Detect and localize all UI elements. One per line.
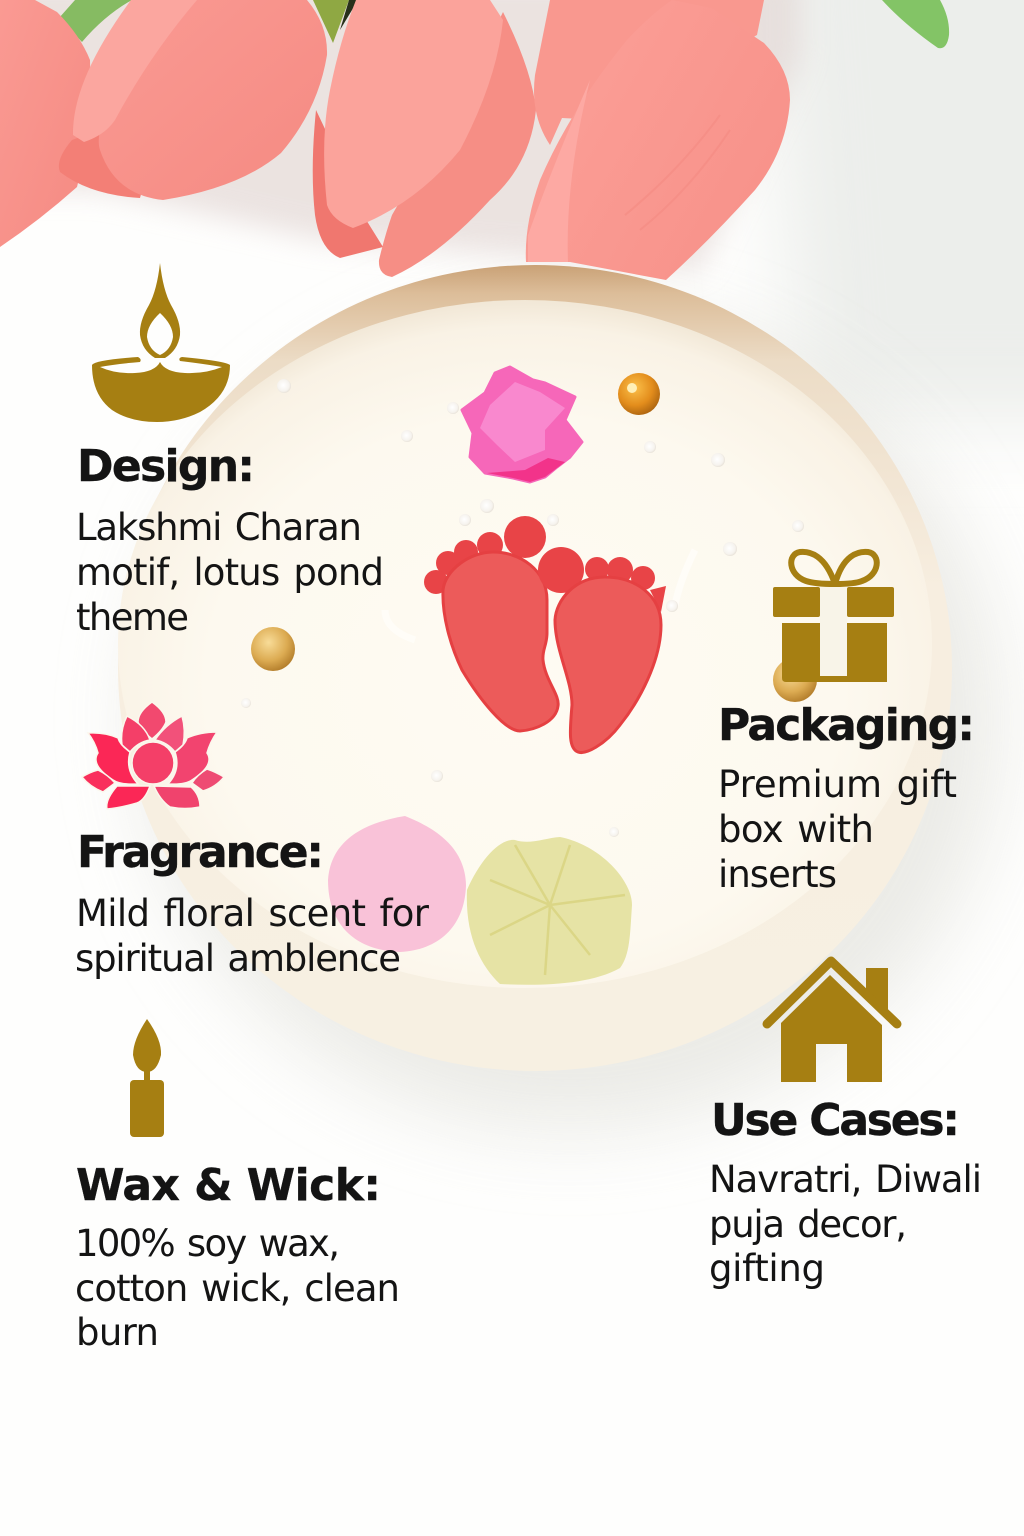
text block: use cases <box>709 1095 982 1290</box>
text block: wax and wick: Wax & Wick: <box>76 1160 381 1211</box>
text block: fragrance: Fragrance: <box>77 827 324 878</box>
text block: use cases: Use Cases: <box>711 1095 960 1146</box>
text block: fragrance <box>75 827 430 980</box>
text block: wax and wick: 100% soy wax, <box>75 1222 340 1265</box>
text block: fragrance: spiritual amblence <box>75 937 401 980</box>
text block: design: motif, lotus pond <box>76 551 384 594</box>
icon: house <box>767 961 897 1082</box>
pink lotus decoration <box>462 367 582 482</box>
text block: packaging <box>718 700 975 896</box>
foot print left <box>424 516 558 731</box>
text block: use cases: gifting <box>709 1247 825 1290</box>
tulips <box>0 0 949 280</box>
stems <box>59 0 132 42</box>
rim <box>118 265 952 1071</box>
text block: use cases: puja decor, <box>709 1203 907 1246</box>
text block: packaging: box with <box>718 808 874 851</box>
tulip 1 <box>0 0 90 247</box>
icon: lotus <box>82 702 224 809</box>
candle <box>118 265 952 1071</box>
wax surface <box>118 300 932 988</box>
text block: design <box>76 441 384 639</box>
text block: packaging: Packaging: <box>718 700 975 751</box>
tulip 4 <box>534 0 764 145</box>
text block: packaging: Premium gift <box>718 763 957 806</box>
icon: candle <box>130 1019 164 1137</box>
text block: design: Design: <box>77 441 255 492</box>
wicks <box>385 610 415 640</box>
tulip 2 <box>59 130 150 198</box>
tulip 3 <box>313 110 383 258</box>
text block: wax and wick: cotton wick, clean <box>75 1267 400 1310</box>
small pearls <box>241 379 804 837</box>
text block: use cases: Navratri, Diwali <box>709 1158 982 1201</box>
lily pad <box>467 837 632 985</box>
foot print right <box>538 547 666 753</box>
text block: packaging: inserts <box>718 853 837 896</box>
text block: design: theme <box>76 596 189 639</box>
background tonal shading <box>0 0 1024 1130</box>
icon: gift box <box>773 552 894 682</box>
pink ball <box>328 816 466 952</box>
text block: design: Lakshmi Charan <box>76 506 362 549</box>
text block: wax and wick: burn <box>76 1311 159 1354</box>
gold beads <box>251 373 817 702</box>
text block: fragrance: Mild floral scent for <box>76 892 430 935</box>
text block: wax and wick <box>75 1160 400 1354</box>
icon: diya <box>92 263 230 422</box>
